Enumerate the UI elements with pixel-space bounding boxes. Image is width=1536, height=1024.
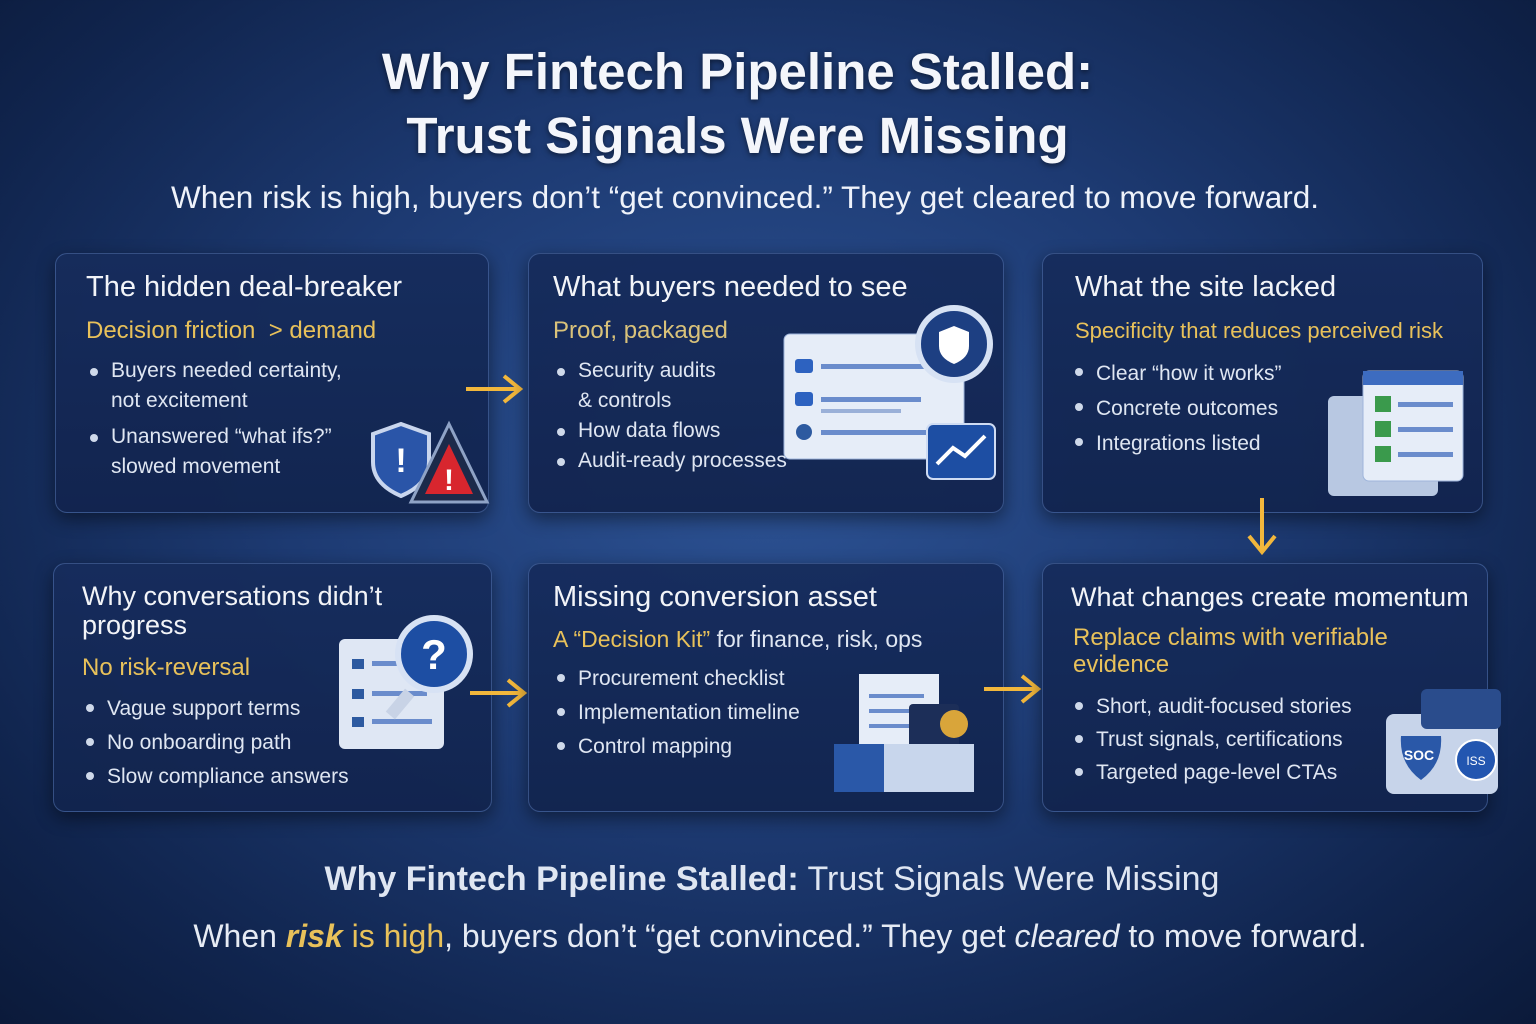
- subheading: evidence: [1073, 651, 1169, 678]
- heading: progress: [82, 610, 187, 640]
- bullets: Trust signals, certifications: [1096, 728, 1343, 751]
- icon: question magnifier: ?: [421, 631, 447, 678]
- icon: question magnifier: [339, 615, 473, 749]
- bullets: Integrations listed: [1096, 432, 1261, 455]
- title: Why Fintech Pipeline Stalled:: [382, 43, 1093, 100]
- footer title: Why Fintech Pipeline Stalled: Trust Signals Were Missing: [325, 860, 1219, 898]
- icon: SOC badge: [1386, 689, 1501, 794]
- bullets: [557, 667, 800, 758]
- icon: checklist windows: [1328, 370, 1464, 496]
- bullets: & controls: [578, 389, 671, 412]
- icon: folder with documents: [834, 674, 974, 792]
- footer subtitle: When risk is high, buyers don’t “get convinced.” They get cleared to move forward.: [193, 918, 1367, 954]
- bullets: [86, 697, 349, 788]
- panel: conversations: [53, 563, 492, 812]
- icon: shield warning: !: [444, 464, 454, 497]
- subheading: Decision friction > demand: [86, 317, 376, 344]
- bullets: Implementation timeline: [578, 701, 800, 724]
- bullets: Control mapping: [578, 735, 732, 758]
- heading: The hidden deal-breaker: [86, 271, 402, 303]
- title: Trust Signals Were Missing: [406, 107, 1069, 164]
- heading: What the site lacked: [1075, 271, 1336, 303]
- panel: hidden deal-breaker: [55, 253, 489, 513]
- icon: shield warning: !: [395, 442, 407, 480]
- heading: What changes create momentum: [1071, 582, 1469, 612]
- bullets: Audit-ready processes: [578, 449, 787, 472]
- panel: momentum: [1042, 563, 1488, 812]
- bullets: [1075, 362, 1282, 455]
- panel: site lacked: [1042, 253, 1483, 513]
- bullets: Clear “how it works”: [1096, 362, 1282, 385]
- subheading: A “Decision Kit” for finance, risk, ops: [553, 626, 922, 652]
- heading: Why conversations didn’t: [82, 581, 382, 611]
- subheading: No risk-reversal: [82, 654, 250, 681]
- bullets: No onboarding path: [107, 731, 291, 754]
- bullets: not excitement: [111, 389, 248, 412]
- subheading: Specificity that reduces perceived risk: [1075, 318, 1443, 343]
- bullets: [90, 359, 342, 478]
- icon: SOC badge: ISS: [1466, 754, 1486, 768]
- bullets: [1075, 695, 1352, 784]
- subheading: Replace claims with verifiable: [1073, 624, 1388, 651]
- bullets: Procurement checklist: [578, 667, 785, 690]
- bullets: Slow compliance answers: [107, 765, 349, 788]
- arrow 2: [470, 678, 527, 708]
- title: [380, 43, 1093, 168]
- bullets: Vague support terms: [107, 697, 300, 720]
- heading: What buyers needed to see: [553, 271, 908, 303]
- arrow 3: [984, 674, 1041, 704]
- bullets: Targeted page-level CTAs: [1096, 761, 1337, 784]
- bullets: How data flows: [578, 419, 720, 442]
- icon: shield warning: [371, 420, 490, 504]
- icon: SOC badge: SOC: [1404, 747, 1434, 763]
- icon: document with shield magnifier: [784, 305, 996, 480]
- bullets: slowed movement: [111, 455, 280, 478]
- bullets: Short, audit-focused stories: [1096, 695, 1352, 718]
- bullets: Concrete outcomes: [1096, 397, 1278, 420]
- arrow 1: [466, 374, 523, 404]
- bullets: Unanswered “what ifs?”: [111, 425, 332, 448]
- panel: missing asset: [528, 563, 1004, 812]
- bullets: Buyers needed certainty,: [111, 359, 342, 382]
- subtitle: When risk is high, buyers don’t “get convinced.” They get cleared to move forward.: [171, 179, 1319, 215]
- subheading: Proof, packaged: [553, 317, 728, 344]
- subheading: [1073, 624, 1388, 678]
- arrow down: [1248, 498, 1276, 555]
- panel: buyers needed: [528, 253, 1004, 513]
- bullets: [557, 359, 787, 472]
- bullets: Security audits: [578, 359, 716, 382]
- heading: [82, 581, 382, 640]
- heading: Missing conversion asset: [553, 581, 877, 613]
